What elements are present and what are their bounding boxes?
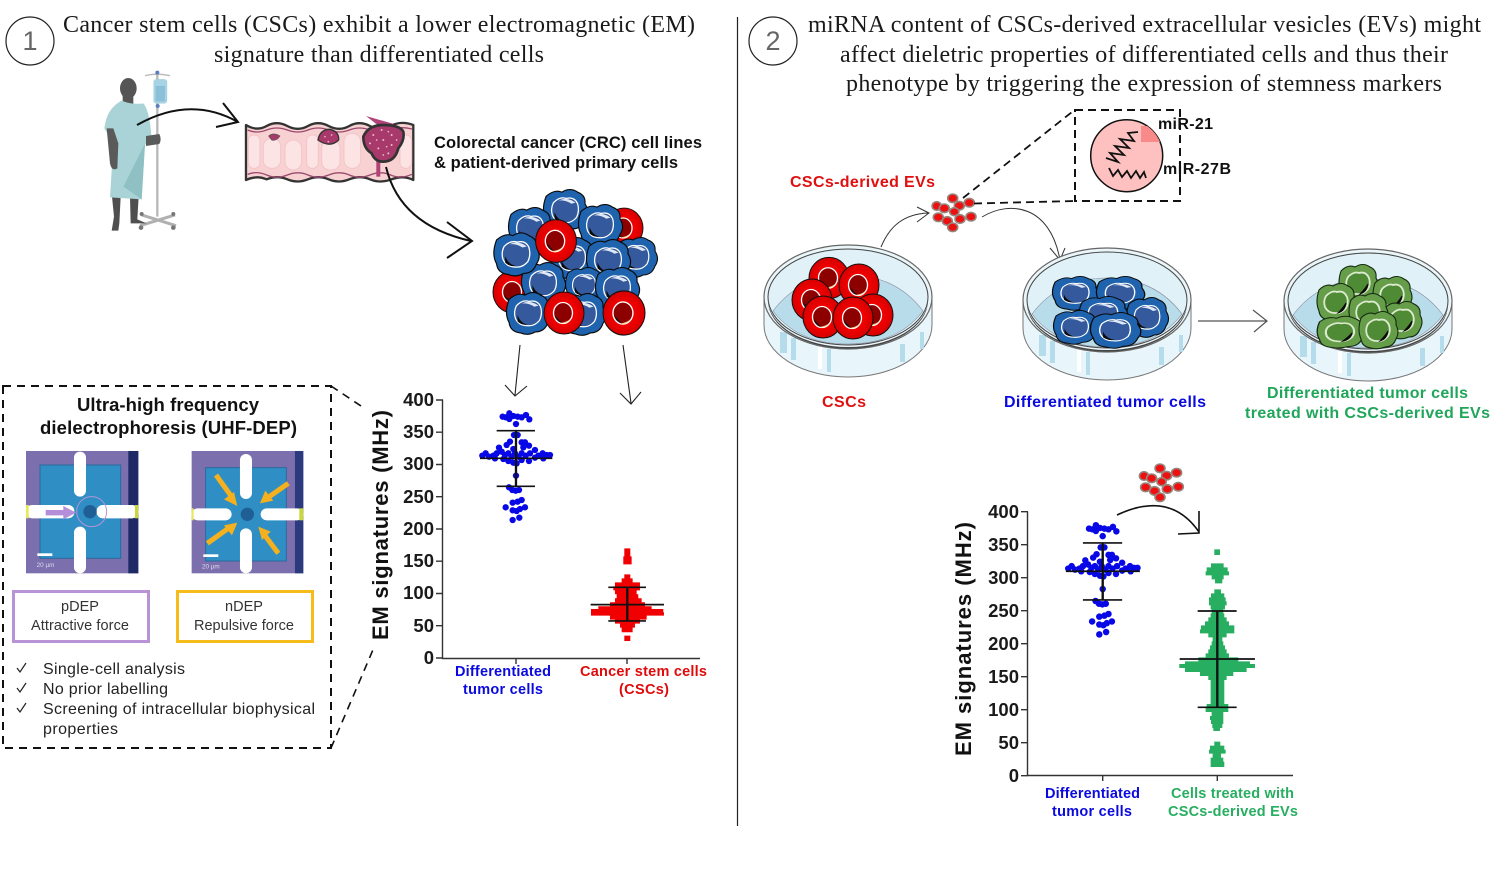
checklist (17, 661, 315, 738)
petri dish: treated cells (1284, 249, 1452, 381)
y tick labels: 300 (403, 453, 434, 474)
chart: EM signatures differentiated vs treated (951, 464, 1298, 820)
number badge 1: 1 (22, 26, 38, 56)
dish labels: CSCs (822, 394, 866, 411)
y tick labels: 100 (403, 582, 434, 603)
caption: cell lines: & patient-derived primary cells (434, 154, 678, 172)
arrow: CSC dish to EVs (881, 207, 929, 247)
y tick labels: 200 (403, 518, 434, 539)
number badge 2 (749, 17, 797, 65)
y tick labels: 0 (1009, 765, 1019, 786)
x labels (1045, 786, 1298, 820)
pDEP box: Attractive force (31, 618, 129, 634)
y axis title: EM signatures (MHz) (951, 522, 976, 756)
micrograph: pDEP chip: 20 µm (37, 562, 54, 569)
axes (436, 400, 700, 664)
number badge 1 (6, 17, 54, 65)
y tick labels: 100 (988, 699, 1019, 720)
arrow: differentiated to treated dish (1198, 310, 1267, 332)
miRNA labels: miR-21 (1158, 116, 1213, 133)
miRNA labels: miR-27B (1163, 161, 1231, 178)
dish labels: treated with CSCs-derived EVs (1245, 405, 1490, 422)
number badge 2: 2 (765, 26, 781, 56)
icon: EV cluster above chart (1139, 464, 1183, 502)
x labels: (CSCs) (619, 682, 669, 698)
UHF-DEP title (40, 394, 297, 438)
arrow: blue cells to chart (505, 345, 527, 396)
y tick labels: 50 (413, 615, 434, 636)
x labels: Cells treated with (1171, 786, 1294, 802)
dish labels: Differentiated tumor cells (1004, 394, 1206, 411)
y tick labels: 300 (988, 567, 1019, 588)
caption: cell lines: Colorectal cancer (CRC) cell lines (434, 134, 702, 152)
x labels: tumor cells (1052, 804, 1132, 820)
arrow: EV treatment (1117, 506, 1199, 534)
x labels (455, 664, 707, 698)
callout: UHF-DEP panel (3, 386, 375, 748)
heading 2 (808, 12, 1481, 97)
checklist: properties (43, 721, 118, 738)
y tick labels: 250 (403, 486, 434, 507)
arrow: EVs to differentiated dish (982, 208, 1065, 260)
chart: EM signatures differentiated vs CSCs (368, 389, 707, 698)
UHF-DEP title: Ultra-high frequency (77, 394, 260, 415)
panel 2: EV miRNA effect (749, 12, 1490, 820)
y tick labels: 350 (988, 534, 1019, 555)
pDEP box: pDEP (61, 599, 99, 615)
vesicle inset with miRNA (963, 110, 1231, 204)
heading 1: signature than differentiated cells (214, 42, 544, 68)
y tick labels: 150 (403, 550, 434, 571)
nDEP box (178, 592, 312, 642)
y tick labels: 150 (988, 666, 1019, 687)
arrow: patient to colon (137, 103, 238, 127)
petri dish: differentiated cells (1023, 248, 1191, 380)
petri dish: CSCs (764, 245, 932, 377)
pDEP box (14, 592, 148, 642)
y axis title: EM signatures (MHz) (368, 410, 393, 640)
icon: EV cluster (932, 194, 976, 232)
y tick labels: 200 (988, 633, 1019, 654)
heading 2: phenotype by triggering the expression of stemness markers (846, 71, 1442, 97)
y tick labels (403, 389, 434, 668)
checklist: Screening of intracellular biophysical (43, 701, 315, 718)
cell cluster (493, 190, 658, 335)
heading 2: affect dieletric properties of differentiated cells and thus their (840, 42, 1448, 68)
arrow: tumor to cells (386, 167, 472, 258)
micrograph: nDEP chip: 20 µm (202, 564, 220, 571)
micrograph: nDEP chip (192, 451, 303, 573)
panel 1: CSC lower EM signature (3, 12, 707, 748)
micrograph: pDEP chip (26, 451, 138, 573)
heading 2: miRNA content of CSCs-derived extracellular vesicles (EVs) might (808, 12, 1481, 38)
heading 1 (63, 12, 695, 68)
label: CSCs-derived EVs: CSCs-derived EVs (790, 174, 935, 191)
y tick labels: 400 (403, 389, 434, 410)
blue swarm (479, 410, 553, 523)
axes (1021, 512, 1293, 781)
checklist: No prior labelling (43, 681, 168, 698)
heading 1: Cancer stem cells (CSCs) exhibit a lower electromagnetic (EM) (63, 12, 695, 38)
green swarm (1179, 549, 1255, 767)
icon: patient with IV drip (104, 71, 176, 231)
x labels: Differentiated (1045, 786, 1140, 802)
red swarm (591, 548, 664, 641)
x labels: tumor cells (463, 682, 543, 698)
icon: colon with tumors (246, 116, 413, 181)
caption: cell lines (434, 134, 702, 172)
divider between panels (736, 17, 738, 826)
dish labels (822, 385, 1490, 422)
nDEP box: nDEP (225, 599, 263, 615)
y tick labels: 0 (424, 647, 434, 668)
checklist: Single-cell analysis (43, 661, 185, 678)
x labels: CSCs-derived EVs (1168, 804, 1298, 820)
y tick labels: 400 (988, 501, 1019, 522)
nDEP box: Repulsive force (194, 618, 294, 634)
miRNA labels (1158, 116, 1231, 178)
y tick labels: 50 (998, 732, 1019, 753)
y tick labels (988, 501, 1019, 786)
x labels: Differentiated (455, 664, 551, 680)
y tick labels: 350 (403, 421, 434, 442)
blue swarm (1065, 522, 1141, 638)
y tick labels: 250 (988, 600, 1019, 621)
x labels: Cancer stem cells (580, 664, 707, 680)
arrow: red cells to chart (620, 345, 641, 404)
dish labels: Differentiated tumor cells (1267, 385, 1468, 402)
UHF-DEP title: dielectrophoresis (UHF-DEP) (40, 417, 297, 438)
